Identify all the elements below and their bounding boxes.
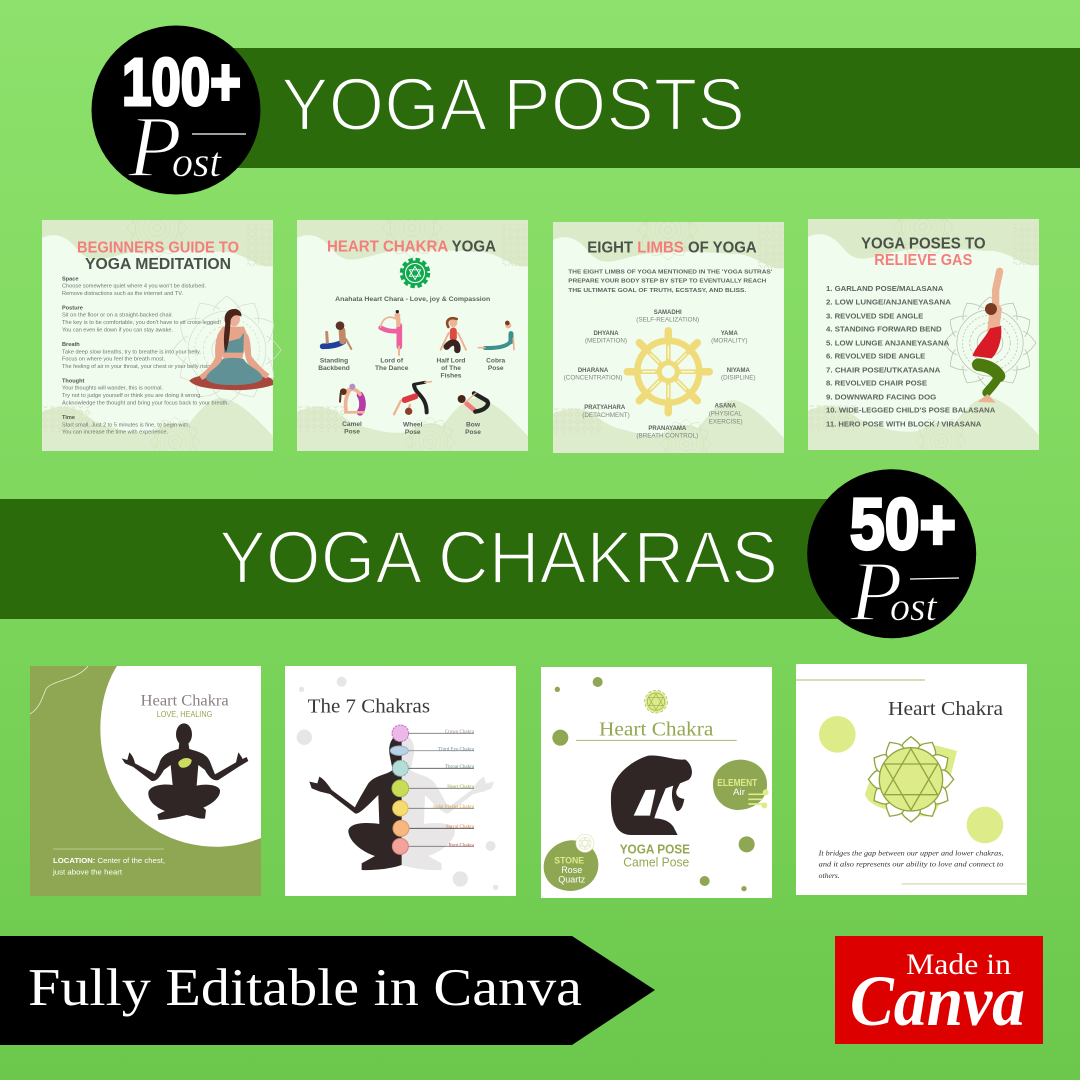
panel: camel pose: Camel Pose [623,855,689,869]
chakra labels [433,730,475,848]
icon: meditating woman [189,309,273,390]
pose labels: Lord of [380,358,404,365]
pose labels: Fishes [441,372,462,380]
panel: beginners guide to yoga meditation: Sit on the floor or on a straight-backed chair. [62,313,173,319]
panel: heart chakra description: others. [819,871,840,880]
panel: yoga poses to relieve gas: 3. REVOLVED SDE ANGLE [826,311,923,320]
wheel labels: EXERCISE) [709,418,743,425]
badge: 100+ post: 100+ [122,45,241,120]
second banner: yoga chakras [0,499,860,619]
panel: camel pose: Heart Chakra [599,719,713,741]
chakra labels: Crown Chakra [445,730,475,735]
heading: yoga posts: YOGA POSTS [281,63,745,146]
panel: beginners guide to yoga meditation: Breath [62,342,80,348]
panel: eight limbs of yoga: THE EIGHT LIMBS OF YOGA MENTIONED IN THE 'YOGA SUTRAS' [568,270,773,276]
panel: yoga poses to relieve gas: 4. STANDING FORWARD BEND [826,325,942,334]
panel: camel pose: YOGA POSE [620,841,690,856]
panel: yoga poses to relieve gas: 11. HERO POSE WITH BLOCK / VIRASANA [826,419,982,428]
chakra labels: Third Eye Chakra [438,748,475,752]
panel: beginners guide to yoga meditation: The key is to be comfortable, you don't have to sit cross-legged! [62,320,221,326]
pose labels: Camel [342,421,362,428]
badge: 50+ post: 50+ [850,485,956,565]
arrow banner: fully editable in canva [0,936,655,1045]
badge: 100+ post: ost [172,140,222,186]
panel: yoga poses to relieve gas: RELIEVE GAS [874,252,973,269]
panel: yoga poses to relieve gas: 9. DOWNWARD FACING DOG [826,392,937,401]
panel: beginners guide to yoga meditation: Take deep slow breaths, try to breathe is into your belly. [62,350,201,356]
pose labels [318,358,506,436]
chakra labels: Throat Chakra [445,765,475,770]
panel: beginners guide to yoga meditation: You can even lie down if you can stay awake. [62,327,173,333]
badge: 100+ post: P [127,99,182,196]
panel: heart chakra yoga: Anahata Heart Chara - Love, joy & Compassion [335,296,490,303]
wheel labels [564,310,756,440]
pose labels: Half Lord [437,358,465,365]
panel: heart chakra location: just above the heart [52,868,123,876]
stone blob [544,840,598,891]
panel: beginners guide to yoga meditation: The feeling of air in your throat, your chest or your belly rising. [62,364,215,370]
panel: beginners guide to yoga meditation: BEGINNERS GUIDE TO [77,240,239,256]
icon: large heart chakra [865,737,957,822]
chakra labels: Root Chakra [449,844,475,848]
panel: heart chakra location: Heart Chakra [141,693,229,710]
panel: the 7 chakras: The 7 Chakras [308,696,430,718]
panel: heart chakra description: Heart Chakra [888,698,1003,720]
pose labels: Cobra [486,358,506,365]
pose labels: Pose [465,429,481,436]
panel: heart chakra description: It bridges the gap between our upper and lower chakras, [818,848,1004,857]
panel: beginners guide to yoga meditation: Remove distractions such as the internet and TV. [62,291,183,297]
panel: heart chakra description [796,664,1027,895]
icon: green heart chakra [402,260,428,286]
badge: made in canva: Made in [906,948,1011,981]
panel: beginners guide to yoga meditation: Posture [62,306,83,312]
panel: heart chakra location: LOCATION: Center of the chest, [53,856,165,865]
wheel labels: DHARANA [578,368,609,374]
wheel labels: (SELF-REALIZATION) [636,317,699,324]
panel: camel pose [541,667,772,898]
top banner: yoga posts [150,48,1080,168]
badge: 50+ post: ost [890,584,938,629]
wheel labels: ASANA [715,404,737,410]
panel: beginners guide to yoga meditation: Thought [62,379,85,385]
panel: heart chakra location: LOVE, HEALING [157,710,212,719]
panel: beginners guide to yoga meditation [42,198,281,467]
pose labels: Pose [405,429,421,436]
icon: chair pose figure [973,271,1001,403]
pose labels: Backbend [318,365,350,372]
wheel labels: (PHYSICAL [709,411,742,418]
panel: beginners guide to yoga meditation: Time [62,415,75,421]
panel: beginners guide to yoga meditation: Choose somewhere quiet where 4 you won't be disturbed. [62,284,206,290]
panel: yoga poses to relieve gas: 7. CHAIR POSE/UTKATASANA [826,365,941,374]
pose labels: Pose [488,365,504,372]
badge: 50+ post: P [849,543,903,639]
panel: heart chakra yoga [297,198,528,467]
panel: camel pose: Quartz [558,874,586,884]
wheel labels: (MORALITY) [711,338,747,345]
heading: yoga chakras: YOGA CHAKRAS [219,516,778,599]
icon: meditating silhouette [122,723,248,820]
badge: made in canva: Canva [850,961,1025,1041]
panel: eight limbs of yoga: THE ULTIMATE GOAL OF TRUTH, ECSTASY, AND BLISS. [568,288,747,294]
panel: the 7 chakras [285,666,516,896]
wheel labels: PRATYAHARA [584,405,626,411]
pose labels: Wheel [403,422,423,429]
panel: camel pose: ELEMENT [717,777,758,789]
badge: 100+ post [92,26,260,196]
pose labels: Pose [344,428,360,435]
wheel labels: (DETACHMENT) [582,412,630,419]
arrow banner: fully editable in canva: Fully Editable in Canva [28,959,582,1017]
pose labels: Bow [466,422,481,429]
wheel labels: YAMA [721,331,739,337]
panel: camel pose: STONE [554,856,584,867]
chakra body diagram [309,725,494,870]
pose illustrations [323,310,514,415]
panel: beginners guide to yoga meditation: Your thoughts will wander, this is normal. [62,386,163,392]
panel: camel pose: Rose [561,865,582,875]
panel: yoga poses to relieve gas: 2. LOW LUNGE/ANJANEYASANA [826,298,952,307]
icon: dharma wheel [627,331,709,413]
element blob [713,760,767,810]
panel: yoga poses to relieve gas: YOGA POSES TO [861,235,986,252]
panel: yoga poses to relieve gas: 5. LOW LUNGE ANJANEYASANA [826,338,950,347]
wheel labels: (BREATH CONTROL) [636,433,698,440]
wheel labels: NIYAMA [727,368,751,374]
panel: beginners guide to yoga meditation: Start small. Just 2 to 5 minutes is fine, to begin with. [62,422,190,428]
pose labels: of The [441,365,461,372]
panel: beginners guide to yoga meditation: Try not to judge yourself or think you are doing it wrong. [62,393,202,399]
wheel labels: (MEDITATION) [585,338,627,345]
panel: yoga poses to relieve gas: 10. WIDE-LEGGED CHILD'S POSE BALASANA [826,406,996,415]
wheel labels: SAMADHI [654,310,682,316]
panel: eight limbs of yoga: EIGHT LIMBS OF YOGA [587,240,757,257]
pose labels: The Dance [375,365,409,372]
panel: beginners guide to yoga meditation: Focus on where you feel the breath most. [62,357,165,363]
icon: camel pose silhouette [611,755,692,835]
badge: 50+ post [807,469,976,639]
wheel labels: DHYANA [593,331,619,337]
panel: eight limbs of yoga: PREPARE YOUR BODY STEP BY STEP TO EVENTUALLY REACH [568,279,766,285]
pose labels: Standing [320,358,348,365]
panel: beginners guide to yoga meditation: Space [62,277,78,283]
chakra labels: Solar Plexus Chakra [433,805,475,810]
panel: yoga poses to relieve gas [808,197,1039,466]
panel: eight limbs of yoga [553,200,784,469]
panel: yoga poses to relieve gas: 6. REVOLVED SIDE ANGLE [826,352,925,361]
icon: small heart chakra [645,690,667,713]
panel: heart chakra yoga: HEART CHAKRA YOGA [327,239,496,256]
panel: heart chakra description: and it also represents our ability to love and connect to [819,860,1004,869]
panel: beginners guide to yoga meditation: YOGA MEDITATION [85,256,231,273]
wheel labels: (DISIPLINE) [721,375,756,382]
panel: camel pose: Air [733,787,745,798]
decorative grey dots [297,677,498,890]
chakra labels: Heart Chakra [447,785,475,790]
chakra labels: Sacral Chakra [446,825,475,830]
panel: heart chakra location [30,666,261,896]
wheel labels: (CONCENTRATION) [564,375,622,382]
wheel labels: PRANAYAMA [648,426,687,432]
panel: yoga poses to relieve gas: 8. REVOLVED CHAIR POSE [826,379,927,388]
panel: yoga poses to relieve gas: 1. GARLAND POSE/MALASANA [826,284,944,293]
badge: made in canva [835,936,1043,1044]
panel: beginners guide to yoga meditation: You can increase the time with experience. [62,429,168,435]
panel: beginners guide to yoga meditation: Acknowledge the thought and bring your focus back to your breath. [62,400,229,406]
